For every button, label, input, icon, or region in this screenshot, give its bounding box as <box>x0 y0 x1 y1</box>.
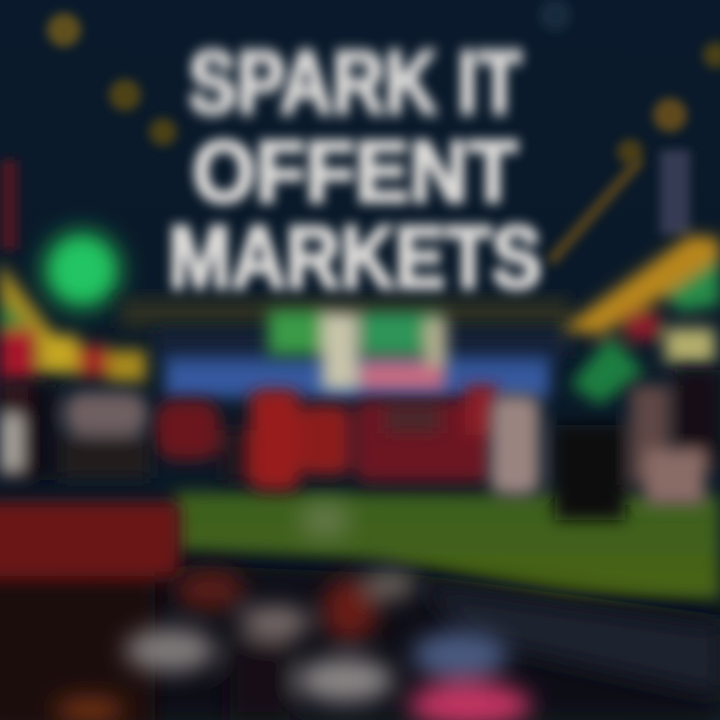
left crowd figures <box>0 380 150 480</box>
foreground dark base <box>0 565 720 720</box>
red central structures <box>155 385 497 490</box>
title: line 3: MARKETS <box>168 209 542 307</box>
left tent <box>0 262 146 382</box>
foreground crowd <box>55 570 532 720</box>
right crowd figures <box>490 370 720 520</box>
horizon band <box>120 298 570 328</box>
title: line 1: SPARK IT <box>188 33 522 131</box>
grass field <box>175 492 720 600</box>
green glowing orb <box>42 230 122 310</box>
central blue stage band <box>155 330 570 398</box>
right tent <box>560 235 720 405</box>
foreground red bench <box>0 502 180 720</box>
central colourful booth <box>268 310 447 390</box>
sky lights <box>47 0 720 165</box>
string lights and poles <box>0 150 690 262</box>
title: line 2: OFFENT <box>192 122 518 220</box>
